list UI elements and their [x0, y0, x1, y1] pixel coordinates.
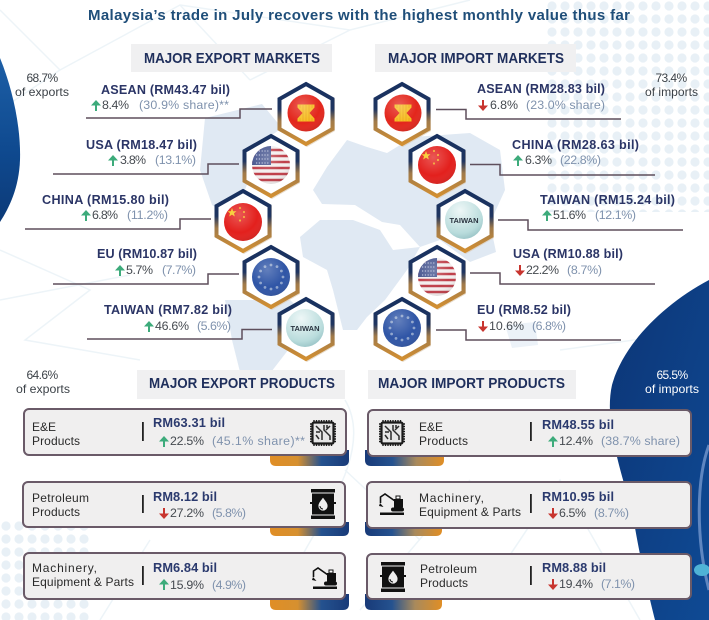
product card: import E&E: 12.4% [559, 434, 593, 448]
import market: EU: (6.8%) [532, 319, 566, 333]
heading: major import markets: MAJOR IMPORT MARKETS [388, 50, 564, 67]
product card: import E&E: RM48.55 bil [542, 417, 614, 432]
icon: chip [379, 420, 405, 446]
product card: export E&E: (45.1% share)** [212, 434, 305, 448]
export market: EU: 5.7% [126, 263, 153, 277]
product card: export machinery: (4.9%) [212, 578, 246, 592]
export market: ASEAN: 8.4% [102, 98, 129, 112]
icon: chip [310, 420, 336, 446]
product card: import E&E: E&E [419, 420, 443, 434]
note: 64.6% of exports [16, 368, 70, 396]
import market: USA: USA (RM10.88 bil) [513, 247, 623, 261]
panel: import products [365, 410, 691, 610]
import market: Taiwan: 51.6% [553, 208, 586, 222]
product card: import machinery: (8.7%) [594, 506, 629, 520]
note: 73.4% of imports [645, 71, 698, 99]
product card: export machinery [24, 553, 349, 610]
import market: China: (22.8%) [560, 153, 601, 167]
note: 68.7% of exports: of exports [15, 85, 69, 99]
product card: export machinery: Equipment & Parts [32, 575, 134, 589]
product card: import petroleum [365, 554, 691, 610]
product card: export petroleum: 27.2% [170, 506, 204, 520]
export market: USA: USA (RM18.47 bil) [86, 138, 197, 152]
import market: EU: EU (RM8.52 bil) [477, 303, 571, 317]
import market: USA: (8.7%) [567, 263, 602, 277]
note: 68.7% of exports [15, 71, 69, 99]
export market: USA: (13.1%) [155, 153, 196, 167]
product card: export petroleum: Petroleum [32, 491, 89, 505]
export market: ASEAN: ASEAN (RM43.47 bil) [101, 83, 230, 97]
note: 65.5% of imports: 65.5% [656, 368, 688, 382]
export market: Taiwan: TAIWAN [290, 324, 320, 333]
background dot pattern: lower left [0, 520, 92, 620]
product card: export machinery: 15.9% [170, 578, 204, 592]
product card: export E&E: RM63.31 bil [153, 415, 225, 430]
export market: Taiwan [87, 298, 335, 362]
heading: major import products: MAJOR IMPORT PRODUCTS [378, 375, 565, 392]
export market: ASEAN [86, 83, 335, 147]
heading: major export products: MAJOR EXPORT PRODUCTS [149, 375, 335, 392]
note: 73.4% of imports: 73.4% [655, 71, 687, 85]
heading: major export markets: MAJOR EXPORT MARKETS [144, 50, 320, 67]
world map backdrop [200, 104, 538, 376]
export market: EU: (7.7%) [162, 263, 196, 277]
product card: export petroleum: (5.8%) [212, 506, 246, 520]
product card: import machinery: 6.5% [559, 506, 586, 520]
note: 64.6% of exports: of exports [16, 382, 70, 396]
panel: import markets [375, 82, 683, 362]
import market: ASEAN: ASEAN (RM28.83 bil) [477, 82, 605, 96]
right blue curved shape [610, 280, 709, 620]
icon: oil barrel [380, 562, 406, 592]
product card: export E&E: E&E [32, 420, 56, 434]
product card: export E&E [24, 409, 349, 466]
light arc on blue shape [699, 445, 709, 590]
export market: China: CHINA (RM15.80 bil) [42, 193, 169, 207]
title: Malaysia’s trade in July recovers with the highest monthly value thus far [88, 7, 630, 24]
export market: ASEAN: (30.9% share)** [139, 98, 229, 112]
heading: major export products [137, 370, 345, 399]
product card: import machinery: Machinery, [419, 491, 484, 505]
note: 73.4% of imports: of imports [645, 85, 698, 99]
note: 68.7% of exports: 68.7% [26, 71, 58, 85]
import market: China: 6.3% [525, 153, 552, 167]
teal decoration [694, 564, 709, 576]
product card: import petroleum: RM8.88 bil [542, 560, 606, 575]
product card: import machinery: RM10.95 bil [542, 489, 614, 504]
product card: export machinery: Machinery, [32, 561, 97, 575]
import market: Taiwan: TAIWAN (RM15.24 bil) [540, 193, 675, 207]
product card: import E&E: (38.7% share) [601, 434, 680, 448]
import market: ASEAN: (23.0% share) [526, 98, 605, 112]
product card: export E&E: Products [32, 434, 80, 448]
export market: Taiwan: 46.6% [155, 319, 189, 333]
left blue curved shape [0, 58, 20, 222]
product card: import machinery: Equipment & Parts [419, 505, 521, 519]
icon: excavator [312, 568, 337, 589]
import market: USA [410, 246, 655, 310]
panel: export markets [25, 83, 335, 362]
product card: export petroleum: RM8.12 bil [153, 489, 217, 504]
heading: major import products [368, 370, 576, 399]
export market: EU: EU (RM10.87 bil) [97, 247, 197, 261]
import market: China: CHINA (RM28.63 bil) [512, 138, 639, 152]
product card: export E&E: 22.5% [170, 434, 204, 448]
import market: EU [375, 298, 621, 362]
export market: China [25, 190, 272, 254]
product card: export petroleum: Products [32, 505, 80, 519]
note: 65.5% of imports [645, 368, 699, 396]
background dot pattern: top right [545, 0, 709, 212]
product card: import petroleum: Petroleum [420, 562, 477, 576]
product card: import petroleum: 19.4% [559, 577, 593, 591]
product card: import petroleum: Products [420, 576, 468, 590]
product card: export machinery: RM6.84 bil [153, 560, 217, 575]
product card: import E&E: Products [419, 434, 468, 448]
export market: Taiwan: TAIWAN (RM7.82 bil) [104, 303, 232, 317]
heading: major export markets [131, 44, 332, 72]
note: 64.6% of exports: 64.6% [26, 368, 58, 382]
import market: Taiwan [438, 190, 683, 254]
import market: China [410, 135, 655, 199]
import market: USA: 22.2% [526, 263, 559, 277]
import market: Taiwan: (12.1%) [595, 208, 636, 222]
import market: EU: 10.6% [489, 319, 524, 333]
product card: import E&E [365, 410, 691, 466]
heading: major import markets [375, 44, 576, 72]
icon: oil barrel [310, 489, 336, 519]
note: 65.5% of imports: of imports [645, 382, 699, 396]
export market: EU [53, 246, 300, 310]
export market: China: (11.2%) [127, 208, 168, 222]
export market: Taiwan: (5.6%) [197, 319, 231, 333]
export market: China: 6.8% [92, 208, 118, 222]
product card: export petroleum [23, 482, 349, 536]
panel: export products [23, 409, 349, 610]
product card: import machinery [365, 482, 691, 536]
export market: USA [53, 135, 300, 199]
icon: excavator [379, 494, 404, 515]
import market: ASEAN: 6.8% [490, 98, 518, 112]
product card: import petroleum: (7.1%) [601, 577, 635, 591]
import market: ASEAN [375, 82, 621, 147]
export market: USA: 3.8% [120, 153, 146, 167]
import market: Taiwan: TAIWAN [449, 216, 479, 225]
